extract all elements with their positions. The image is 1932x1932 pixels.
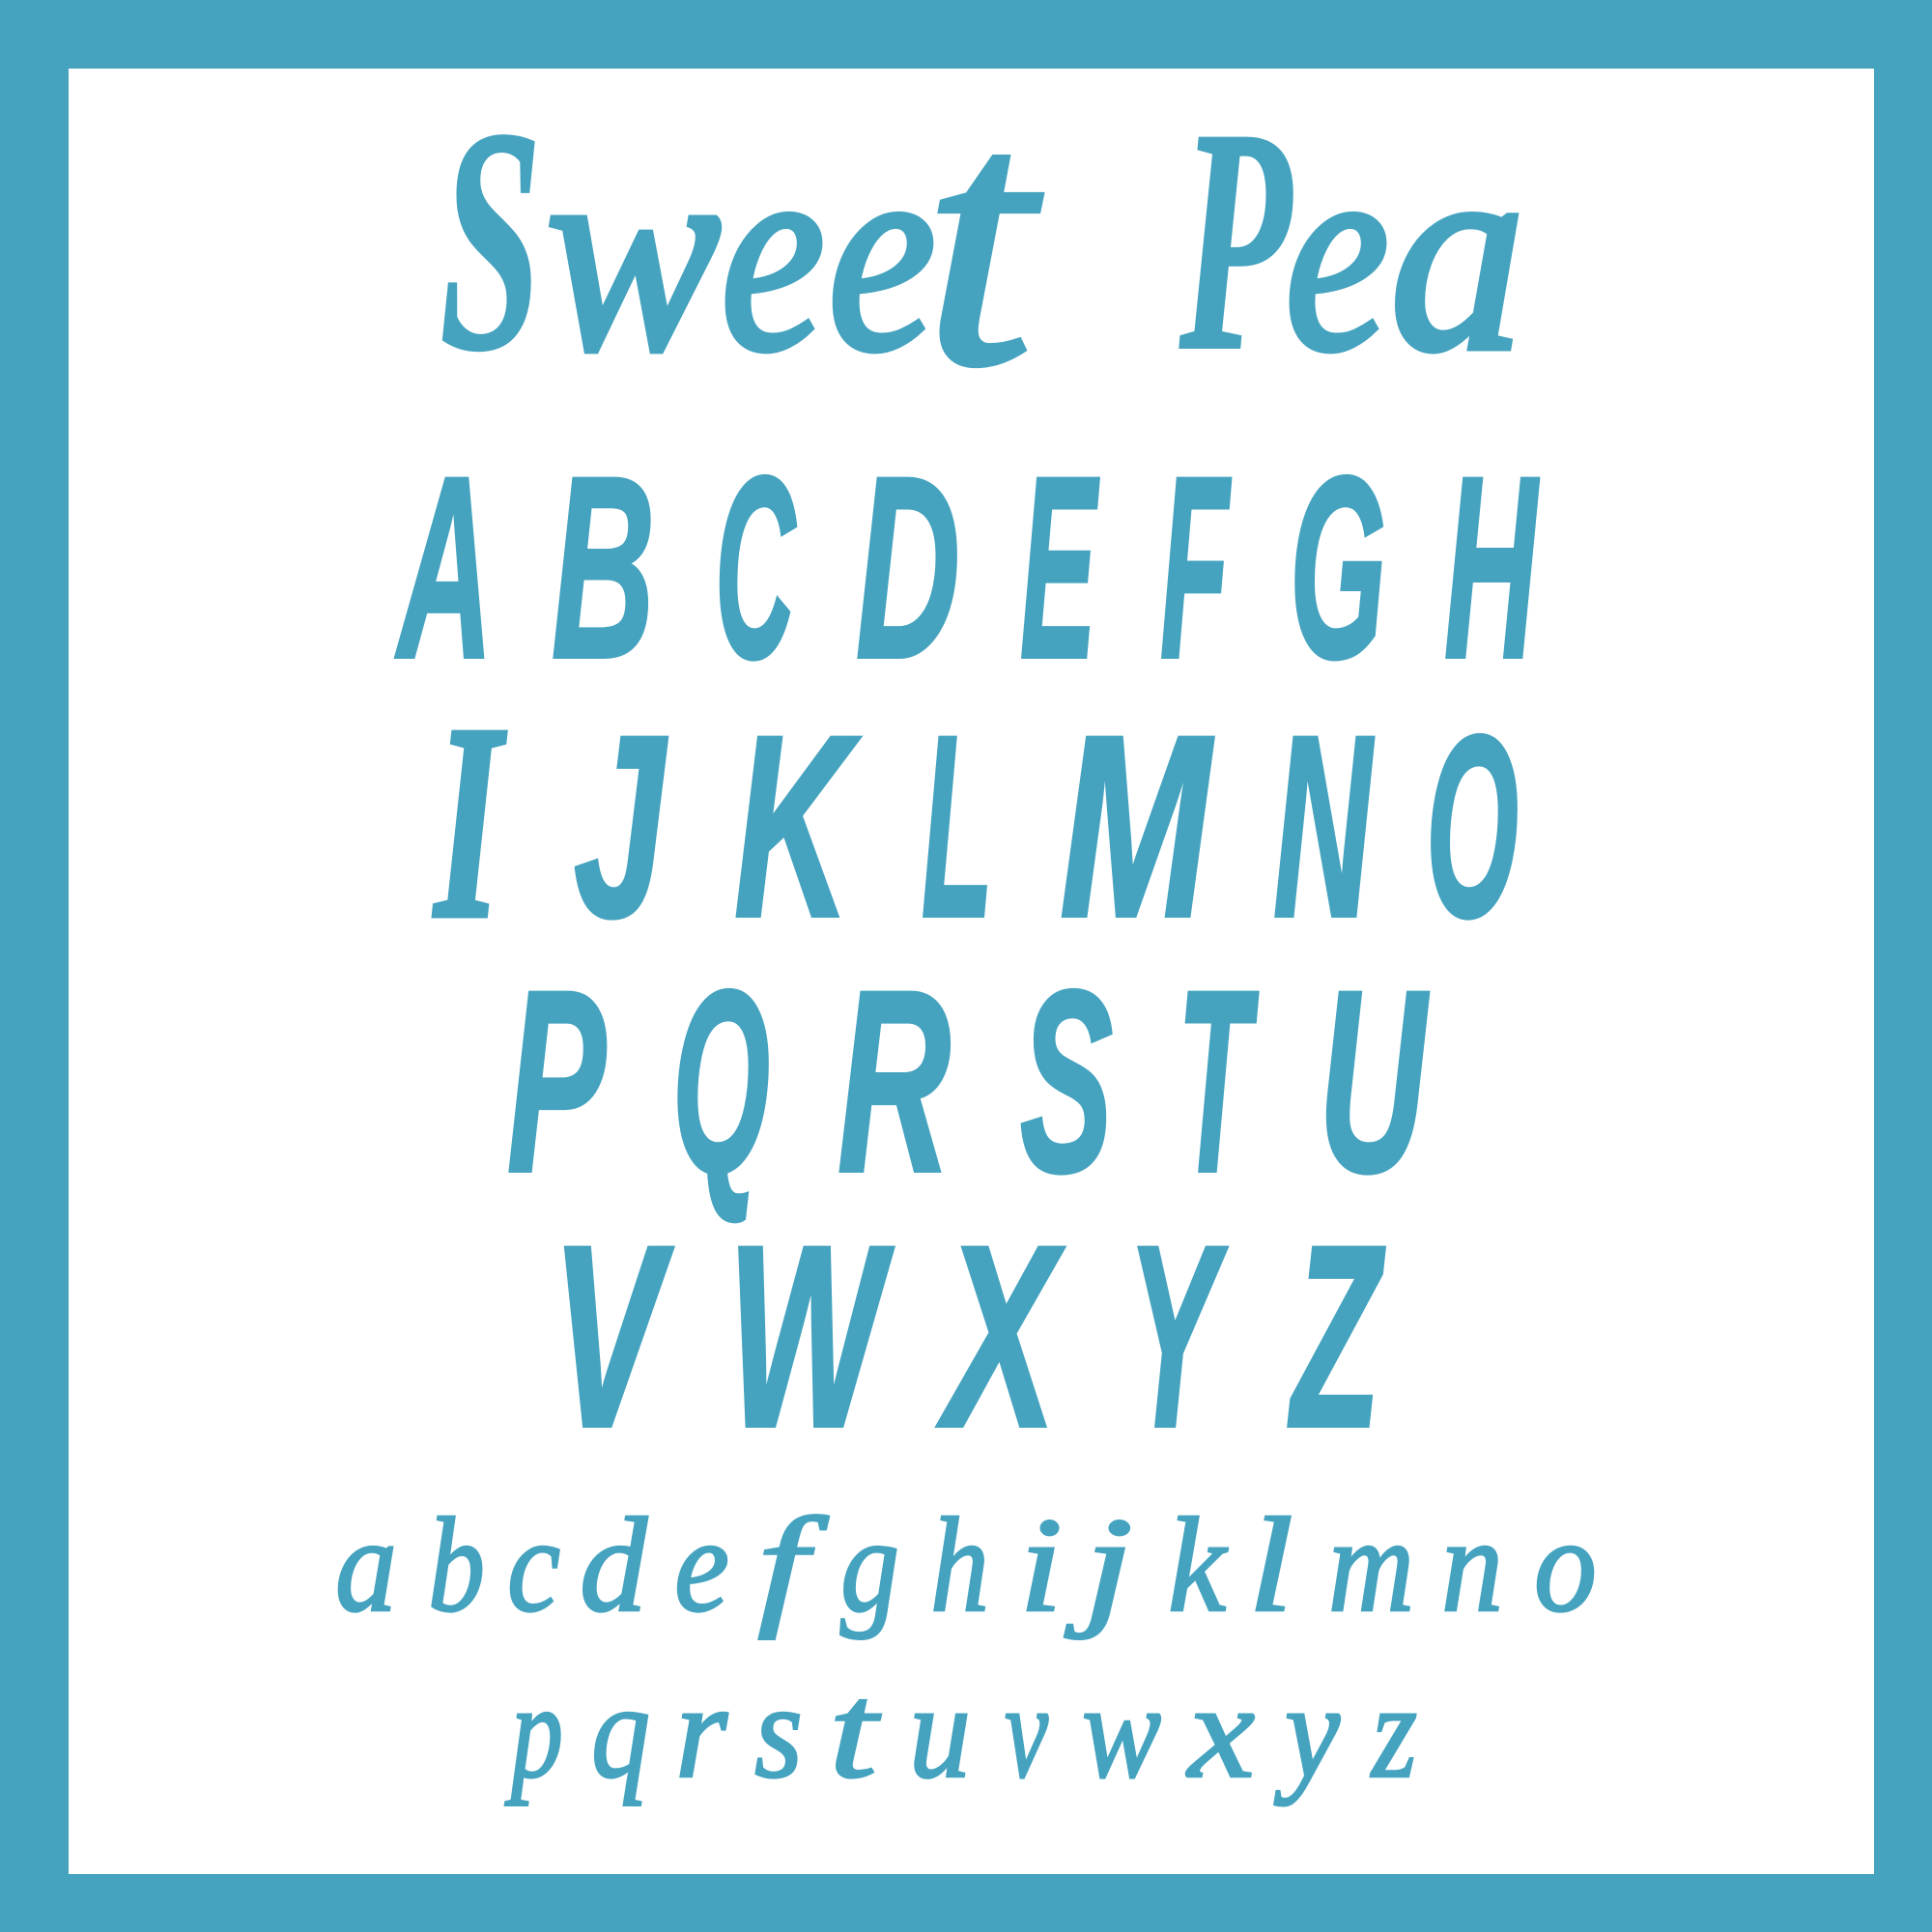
uppercase row: V to Z: V	[552, 1191, 675, 1481]
uppercase row: A to H: D	[856, 422, 960, 712]
lowercase row: a to o: j	[1065, 1491, 1133, 1640]
lowercase row: p to z	[504, 1657, 1417, 1806]
uppercase row: V to Z: X	[937, 1191, 1065, 1481]
lowercase row: p to z: y	[1274, 1657, 1341, 1806]
lowercase row: a to o: o	[1534, 1491, 1597, 1640]
uppercase row: V to Z: Z	[1287, 1191, 1387, 1481]
title: Sweet Pea: e	[828, 98, 936, 410]
uppercase row: V to Z	[552, 1191, 1387, 1481]
lowercase row: p to z: x	[1186, 1657, 1255, 1806]
lowercase row: p to z: w	[1082, 1657, 1161, 1806]
uppercase row: A to H: C	[715, 422, 796, 712]
uppercase row: I to O: N	[1273, 681, 1376, 971]
lowercase row: p to z: z	[1370, 1657, 1417, 1806]
uppercase row: I to O: K	[734, 681, 862, 971]
uppercase row: I to O: I	[432, 667, 507, 977]
uppercase row: A to H: B	[552, 422, 655, 712]
title: Sweet Pea: w	[546, 98, 722, 410]
uppercase row: A to H: H	[1444, 422, 1541, 712]
uppercase row: P to U: U	[1319, 936, 1430, 1226]
lowercase row: a to o: n	[1441, 1491, 1503, 1640]
title: Sweet Pea: e	[1285, 98, 1389, 410]
uppercase row: V to Z: Y	[1127, 1191, 1229, 1481]
lowercase row: p to z: v	[1005, 1657, 1049, 1806]
title: Sweet Pea: S	[440, 62, 542, 417]
lowercase row: a to o: f	[757, 1491, 830, 1640]
uppercase row: P to U: Q	[672, 936, 770, 1226]
lowercase row: a to o: e	[674, 1491, 729, 1640]
lowercase row: a to o: l	[1248, 1491, 1293, 1640]
lowercase row: p to z: q	[591, 1657, 650, 1806]
lowercase row: p to z: u	[909, 1657, 971, 1806]
title: Sweet Pea: t	[924, 40, 1046, 440]
uppercase row: I to O: L	[922, 681, 993, 971]
lowercase row: p to z: r	[675, 1657, 728, 1806]
title: Sweet Pea: e	[721, 98, 825, 410]
lowercase row: a to o: d	[580, 1491, 648, 1640]
title: Sweet Pea	[440, 40, 1525, 440]
title: Sweet Pea: P	[1177, 62, 1294, 417]
uppercase row: P to U: T	[1178, 936, 1259, 1226]
uppercase row: I to O: J	[574, 681, 668, 971]
lowercase row: a to o	[335, 1491, 1597, 1640]
text: O	[1426, 681, 1519, 971]
uppercase row: A to H: G	[1290, 422, 1386, 712]
title: Sweet Pea: a	[1390, 98, 1525, 410]
lowercase row: a to o: i	[1019, 1491, 1063, 1640]
uppercase row: P to U: R	[838, 936, 951, 1226]
uppercase row: A to H	[394, 422, 1541, 712]
uppercase row: P to U: S	[1020, 936, 1114, 1226]
uppercase row: P to U	[507, 936, 1430, 1226]
lowercase row: p to z: p	[504, 1657, 563, 1806]
uppercase row: A to H: E	[1020, 422, 1100, 712]
lowercase row: p to z: s	[754, 1657, 803, 1806]
lowercase row: a to o: g	[840, 1491, 899, 1640]
uppercase row: A to H: F	[1160, 422, 1232, 712]
lowercase row: a to o: m	[1328, 1491, 1414, 1640]
lowercase row: a to o: h	[930, 1491, 989, 1640]
lowercase row: a to o: c	[507, 1491, 560, 1640]
uppercase row: P to U: P	[507, 936, 607, 1226]
uppercase row: V to Z: W	[727, 1191, 894, 1481]
lowercase row: a to o: k	[1168, 1491, 1229, 1640]
uppercase row: A to H: A	[394, 422, 493, 712]
lowercase row: a to o: a	[335, 1491, 397, 1640]
lowercase row: a to o: b	[428, 1491, 485, 1640]
lowercase row: p to z: t	[829, 1657, 881, 1806]
uppercase row: I to O: M	[1060, 681, 1215, 971]
uppercase row: I to O	[432, 667, 1519, 977]
